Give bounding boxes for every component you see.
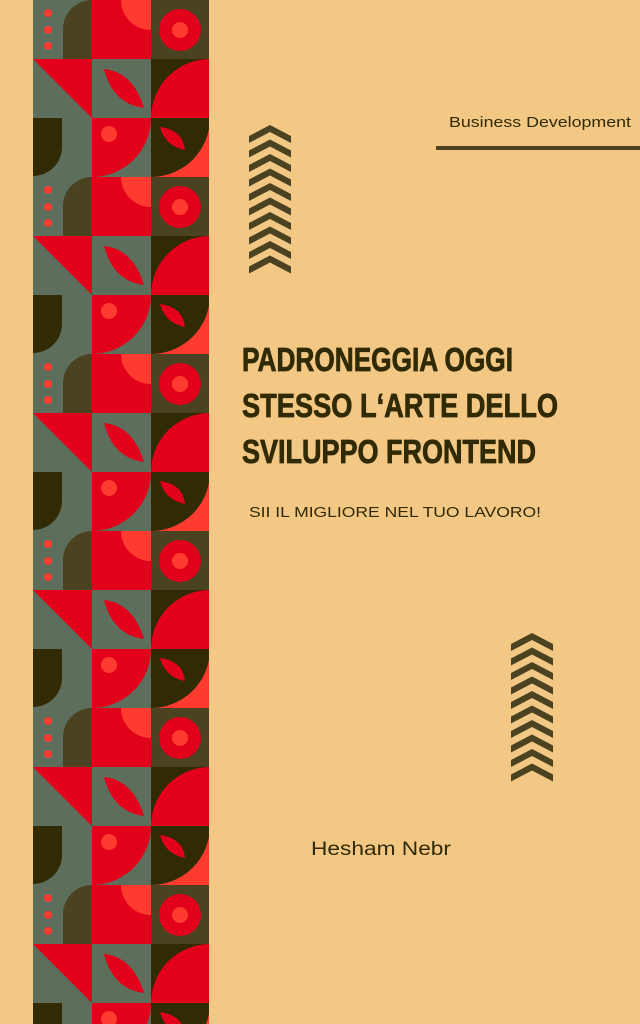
decorative pattern strip [33,0,209,1024]
divider line [436,146,640,150]
icon: chevrons bottom [511,633,553,782]
author: Hesham Nebr [311,839,452,860]
title: STESSO L‘ARTE DELLO [242,387,558,424]
title [242,341,558,470]
title: SVILUPPO FRONTEND [242,433,536,470]
icon: chevrons top [249,125,291,274]
title: PADRONEGGIA OGGI [242,341,513,378]
subtitle: SII IL MIGLIORE NEL TUO LAVORO! [249,504,541,521]
category label: Business Development [449,114,632,131]
